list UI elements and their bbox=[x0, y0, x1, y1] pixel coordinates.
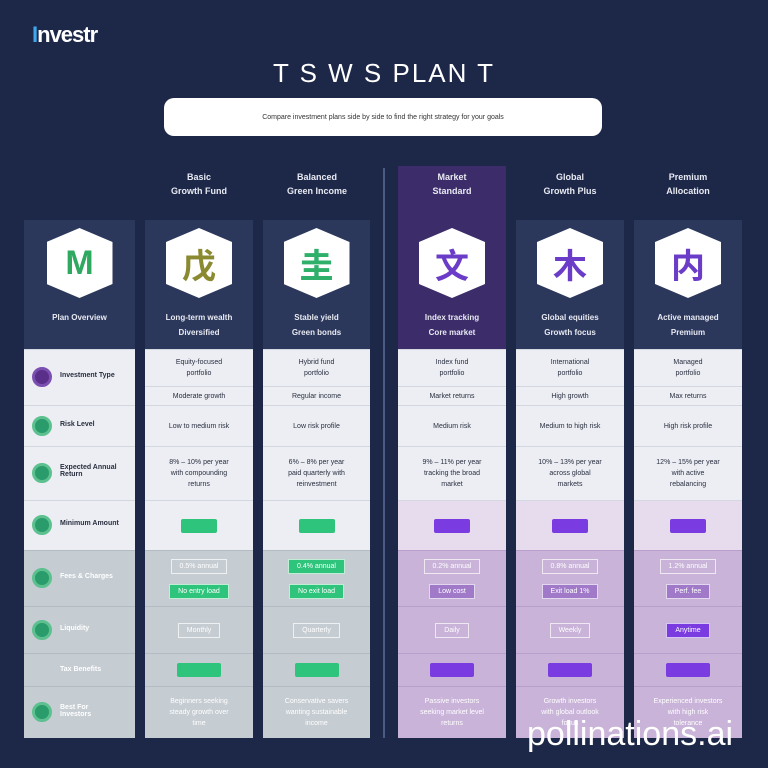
panel: plan 5 purple: with high risk bbox=[668, 709, 708, 716]
panel: plan 1 green: 戊 bbox=[182, 248, 216, 286]
panel: plan 4 purple: markets bbox=[558, 481, 582, 488]
watermark: pollinations.ai bbox=[527, 715, 733, 753]
panel: plan 3 purple: 0.2% annual bbox=[433, 562, 471, 570]
panel: plan 4 purple: Growth investors bbox=[544, 698, 596, 705]
panel: plan 2 green bbox=[263, 220, 370, 738]
panel: row labels: Tax Benefits bbox=[60, 666, 101, 673]
panel: plan 1 green: Beginners seeking bbox=[170, 698, 228, 705]
panel: plan 5 purple: 12% – 15% per year bbox=[656, 459, 720, 466]
panel: plan 5 purple: Managed bbox=[673, 359, 703, 366]
panel: row labels: Expected Annual bbox=[60, 464, 117, 471]
logo: Investr bbox=[32, 22, 97, 47]
panel: plan 3 purple: seeking market level bbox=[420, 709, 484, 716]
panel: plan 4 purple: Global equities bbox=[541, 313, 599, 322]
panel: row labels: Fees & Charges bbox=[60, 573, 113, 580]
panel: plan 1 green: Low to medium risk bbox=[169, 422, 229, 430]
panel: row labels bbox=[24, 220, 135, 738]
panel: plan 5 purple: 内 bbox=[671, 248, 705, 286]
panel: plan 5 purple: High risk profile bbox=[664, 422, 712, 430]
panel: plan 3 purple: tracking the broad bbox=[424, 470, 480, 477]
panel: plan 1 green: No entry load bbox=[178, 588, 220, 594]
column headers: Balanced bbox=[297, 172, 337, 182]
panel: plan 2 green: No exit load bbox=[298, 588, 335, 594]
panel: plan 1 green: time bbox=[192, 720, 206, 727]
panel: plan 2 green: Stable yield bbox=[294, 313, 339, 322]
divider bbox=[383, 168, 385, 738]
column headers: Market bbox=[437, 172, 466, 182]
panel: plan 5 purple: Perf. fee bbox=[675, 588, 701, 594]
panel: plan 4 purple: Medium to high risk bbox=[540, 422, 600, 430]
purple header band bbox=[398, 166, 506, 226]
panel: plan 4 purple bbox=[516, 220, 624, 738]
panel: plan 5 purple: Max returns bbox=[670, 392, 706, 400]
panel: plan 1 green bbox=[145, 220, 253, 738]
panel: plan 1 green: Equity-focused bbox=[176, 359, 222, 366]
panel: plan 1 green: Moderate growth bbox=[173, 392, 225, 400]
panel: plan 3 purple: 文 bbox=[435, 248, 469, 286]
panel: plan 3 purple: Passive investors bbox=[425, 698, 479, 705]
panel: plan 4 purple: 木 bbox=[553, 248, 587, 286]
panel: plan 4 purple: High growth bbox=[551, 392, 589, 400]
panel: plan 2 green: Quarterly bbox=[302, 626, 331, 634]
panel: plan 2 green: reinvestment bbox=[296, 481, 337, 488]
panel: plan 3 purple: Index tracking bbox=[425, 313, 479, 322]
panel: plan 3 purple: portfolio bbox=[440, 370, 464, 377]
panel: row labels: Best For bbox=[60, 704, 88, 711]
panel: row labels: Minimum Amount bbox=[60, 520, 119, 527]
panel: plan 2 green: 0.4% annual bbox=[297, 562, 336, 570]
panel: plan 4 purple: International bbox=[551, 359, 589, 366]
panel: plan 3 purple: Index fund bbox=[436, 359, 468, 366]
panel: plan 5 purple: 1.2% annual bbox=[669, 562, 707, 570]
panel: plan 5 purple: Anytime bbox=[675, 626, 701, 634]
panel: row labels: Investment Type bbox=[60, 372, 115, 379]
column headers: Growth Plus bbox=[543, 186, 596, 196]
column headers bbox=[171, 172, 710, 196]
column headers: Growth Fund bbox=[171, 186, 227, 196]
panel: plan 1 green: 0.5% annual bbox=[180, 562, 218, 570]
panel: plan 3 purple: Low cost bbox=[438, 588, 466, 594]
panel: plan 4 purple: Growth focus bbox=[544, 328, 596, 337]
panel: plan 4 purple: Exit load 1% bbox=[551, 588, 589, 594]
panel: plan 2 green: Hybrid fund bbox=[299, 359, 334, 366]
panel: plan 3 purple bbox=[398, 220, 506, 738]
subtitle banner bbox=[164, 98, 602, 136]
column headers: Global bbox=[556, 172, 584, 182]
panel: plan 3 purple: returns bbox=[441, 720, 463, 727]
column headers: Standard bbox=[432, 186, 472, 196]
panel: plan 1 green: portfolio bbox=[187, 370, 211, 377]
panel: plan 2 green: Green bonds bbox=[292, 328, 341, 337]
panel: row labels: M bbox=[65, 244, 94, 282]
panel: plan 3 purple: Daily bbox=[444, 626, 460, 634]
panel: plan 2 green: 6% – 8% per year bbox=[289, 459, 344, 466]
panel: plan 3 purple: Market returns bbox=[429, 392, 475, 400]
panel: plan 2 green: Low risk profile bbox=[293, 422, 340, 430]
column headers: Allocation bbox=[666, 186, 710, 196]
panel: row labels: Liquidity bbox=[60, 625, 89, 632]
panel: plan 4 purple: 0.8% annual bbox=[551, 562, 589, 570]
panel: plan 1 green: Monthly bbox=[187, 626, 211, 634]
panel: row labels: Return bbox=[60, 471, 83, 478]
panel: plan 1 green: with compounding bbox=[171, 470, 227, 477]
panel: plan 5 purple: Active managed bbox=[657, 313, 719, 322]
panel: row labels: Plan Overview bbox=[52, 313, 107, 322]
column headers: Basic bbox=[187, 172, 211, 182]
panel: plan 4 purple: portfolio bbox=[558, 370, 582, 377]
panel: plan 5 purple: tolerance bbox=[674, 720, 702, 727]
panel: plan 3 purple: 9% – 11% per year bbox=[422, 459, 482, 466]
panel: plan 2 green: wanting sustainable bbox=[286, 709, 347, 716]
panel: row labels: Investors bbox=[60, 711, 91, 718]
panel: plan 1 green: Long-term wealth bbox=[166, 313, 232, 322]
subtitle banner: Compare investment plans side by side to find the right strategy for your goals bbox=[262, 114, 504, 120]
panel: plan 2 green: Regular income bbox=[292, 392, 341, 400]
panel: plan 2 green: Conservative savers bbox=[285, 698, 348, 705]
panel: plan 5 purple: Experienced investors bbox=[654, 698, 722, 705]
panel: row labels: Risk Level bbox=[60, 421, 95, 428]
panel: plan 4 purple: Weekly bbox=[559, 626, 581, 634]
panel: plan 3 purple: market bbox=[441, 481, 463, 488]
panel: plan 3 purple: Medium risk bbox=[433, 422, 471, 430]
panel: plan 5 purple: with active bbox=[672, 470, 704, 477]
panel: plan 2 green: 圭 bbox=[300, 248, 334, 286]
panel: plan 1 green: returns bbox=[188, 481, 210, 488]
panel: plan 2 green: paid quarterly with bbox=[288, 470, 345, 477]
panel: plan 5 purple bbox=[634, 220, 742, 738]
panel: plan 1 green: 8% – 10% per year bbox=[169, 459, 229, 466]
panel: plan 4 purple: 10% – 13% per year bbox=[538, 459, 602, 466]
title: T S W S PLAN T bbox=[273, 58, 495, 88]
panel: plan 5 purple: rebalancing bbox=[670, 481, 706, 488]
column headers: Premium bbox=[669, 172, 707, 182]
panel: plan 4 purple: with global outlook bbox=[541, 709, 599, 716]
panel: plan 5 purple: Premium bbox=[671, 328, 705, 337]
column headers: Green Income bbox=[287, 186, 347, 196]
panel: plan 4 purple: focus bbox=[562, 720, 578, 727]
panel: plan 2 green: income bbox=[305, 720, 328, 727]
panel: plan 2 green: portfolio bbox=[304, 370, 329, 377]
panel: plan 1 green: Diversified bbox=[179, 328, 219, 337]
panel: plan 4 purple: across global bbox=[549, 470, 591, 477]
panel: plan 1 green: steady growth over bbox=[169, 709, 229, 716]
panel: plan 3 purple: Core market bbox=[429, 328, 475, 337]
panel: plan 5 purple: portfolio bbox=[676, 370, 700, 377]
